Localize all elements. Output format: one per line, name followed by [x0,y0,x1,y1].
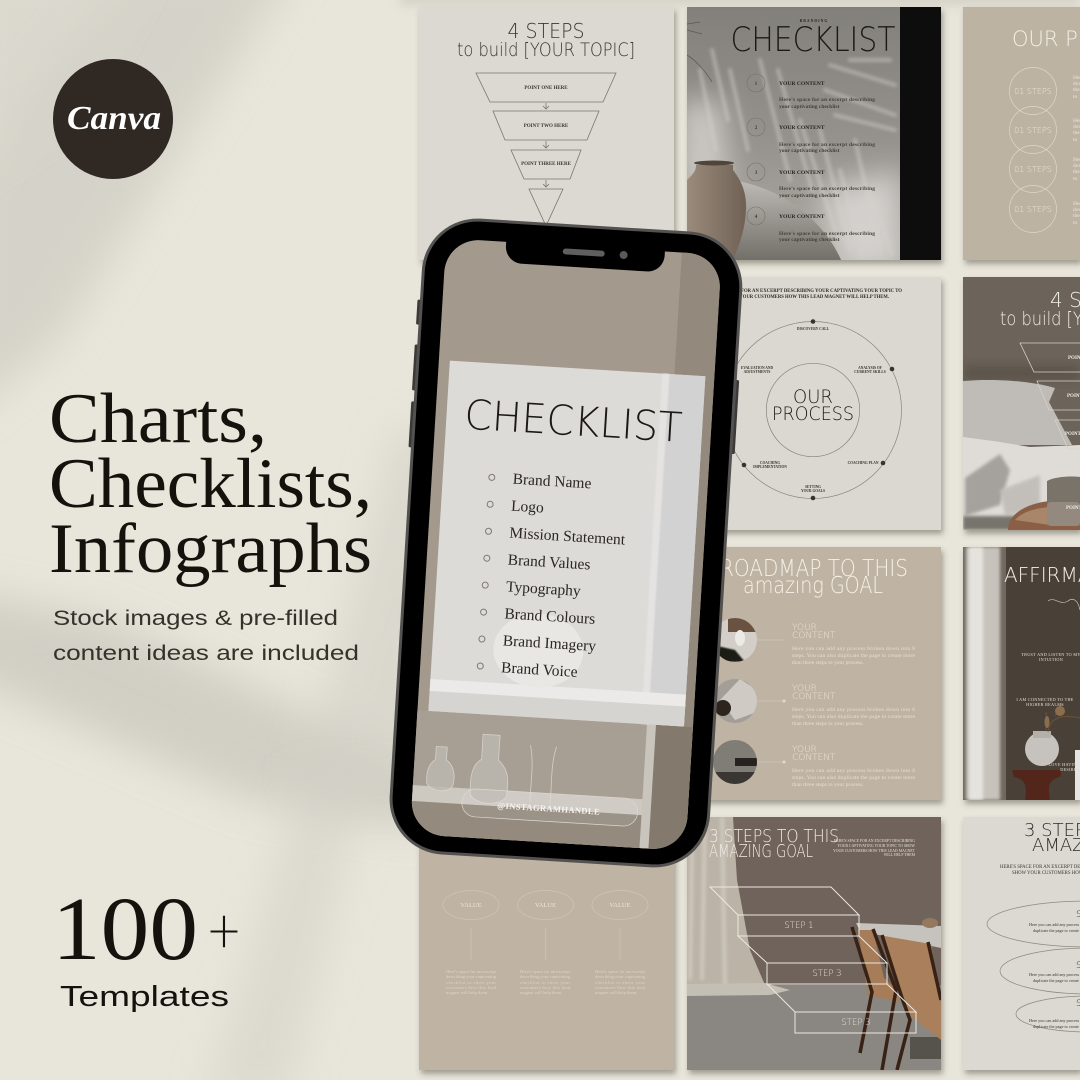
instagram handle pill: @INSTAGRAMHANDLE [497,800,600,817]
process title: PROCESS [772,403,854,425]
process labels: DISCOVERY CALL [797,327,830,331]
table [856,923,941,948]
roadmap steps text [792,623,836,763]
process labels: ANALYSIS OF [858,366,883,370]
funnel title: 4 STEPS [508,19,584,43]
process labels: CURRENT SKILLS [854,370,886,374]
panel: 4 steps funnel [419,7,674,260]
panel: our process steps: the [1073,87,1080,93]
panel: our process circle diagram [687,277,941,530]
panel: our process steps: to [1073,94,1078,100]
affirmations text: I AM CONNECTED TO THE [1016,697,1074,702]
funnel title: to build [YOUR TOPIC] [457,39,635,61]
checklist panel text: BRANDING [800,19,828,23]
heading: Charts, Checklists, Infographs: Charts, [49,380,267,458]
panel: our process steps: 01 STEPS [1014,205,1052,214]
checklist panel text: 4 [755,215,758,220]
checklist panel text: your captivating checklist [779,148,840,154]
checklist items: Typography [506,578,581,600]
panel: our process steps: the [1073,169,1080,175]
panel: roadmap: than three steps to your process. [792,782,864,788]
rug [687,983,790,996]
value descriptions: checklist to show your [446,980,496,985]
checklist panel text: Here's space for an excerpt describing [779,97,875,103]
process labels [741,327,886,493]
checklist panel text: YOUR CONTENT [779,125,825,131]
white checklist card [428,361,705,727]
chair one [858,930,900,1002]
phone speaker [563,248,605,257]
panel: our process steps: 01 STEPS [1014,126,1052,135]
checklist items: Brand Values [507,551,591,574]
white round vase [494,614,583,686]
3 steps text and stairs: YOUR CAPTIVATING YOUR TOPIC TO SHOW [837,844,915,848]
value descriptions: customers how this lead [595,985,646,990]
value descriptions: Here's space for an excerpt [446,969,497,974]
pillow [963,380,1072,445]
panel: our process circle diagram: HERE'S SPACE FOR AN EXCERPT DESCRIBING YOUR CAPTIVATING YOUR TOPIC TO [706,289,902,294]
value descriptions: Here's space for an excerpt [520,969,571,974]
affirmations text: INTUITION [1039,657,1063,662]
step circles [1010,68,1056,232]
vase [687,165,746,262]
phone notch [505,238,665,272]
affirmations text [1004,563,1080,772]
process labels: SETTING [805,485,821,489]
tray [1008,501,1080,530]
subheading text: Stock images & pre-filled [53,607,338,630]
panel: our process circle diagram: SHOW YOUR CUSTOMERS HOW THIS LEAD MAGNET WILL HELP THEM. [724,295,890,300]
checklist items: Mission Statement [509,525,626,549]
panel: our process steps: 01 STEPS [1014,87,1052,96]
value descriptions: describing your captivating [520,974,571,979]
checklist panel text: 1 [755,82,758,87]
panel: 3 steps photo [687,817,941,1070]
heading: Charts, Checklists, Infographs [49,380,372,588]
panel: roadmap: than three steps to your process. [792,721,864,727]
phone side buttons [408,299,743,467]
logo: Canva badge: Canva [67,100,161,137]
panel: roadmap: Here you can add any process broken down into 6 [792,646,915,652]
roadmap photos [713,618,757,784]
stool [1012,770,1062,800]
process labels: COACHING PLAN [848,461,879,465]
bedroom panel text [1000,288,1080,511]
stat: 100+ templates [52,880,242,1013]
3 steps text and stairs: YOUR CUSTOMERS HOW THIS LEAD MAGNET [833,849,916,853]
roadmap title [720,556,908,599]
checklist items [501,471,630,683]
panel: affirmations photo [963,547,1080,800]
checklist panel text: Here's space for an excerpt describing [779,231,875,237]
process title: OUR [793,386,833,408]
panel: our process steps: 01 STEPS [1014,165,1052,174]
checklist panel text: YOUR CONTENT [779,81,825,87]
panel: our process steps: the [1073,213,1080,219]
stat: 100+ templates: + [206,901,242,959]
phone mockup [384,217,748,869]
3 steps text and stairs: STEP 1 [784,921,814,931]
3 steps text and stairs: 3 STEPS TO THIS [709,826,839,847]
checklist panel text: your captivating checklist [779,104,840,110]
roadmap steps text: YOUR [792,623,817,633]
checklist panel text: your captivating checklist [779,193,840,199]
checklist items: Brand Voice [501,659,578,681]
roadmap steps text: YOUR [792,684,817,694]
curtain [963,547,1006,800]
funnel labels: POINT ONE HERE [524,86,568,91]
right door frame [647,725,695,852]
bright wall patches [680,100,730,190]
panel: our process steps: to [1073,220,1078,226]
ovals [987,901,1080,1032]
process labels: IMPLEMENTATION [753,465,787,469]
panel: our process steps [963,7,1080,260]
checklist panel text: YOUR CONTENT [779,214,825,220]
3 steps text and stairs [709,826,916,1033]
panel: 3 steps ovals [963,817,1080,1070]
checklist items: Brand Imagery [502,632,597,655]
3 steps text and stairs: WILL HELP THEM [884,853,916,857]
value descriptions: magnet will help them. [520,990,562,995]
subheading text: content ideas are included [53,642,359,665]
roadmap steps text: CONTENT [792,753,836,763]
stat: 100+ templates: Templates [60,981,229,1013]
roadmap steps text: CONTENT [792,692,836,702]
process labels: ADJUSTMENTS [744,370,770,374]
panel: value columns: VALUE [460,902,482,909]
heading: Charts, Checklists, Infographs: Checklists, [49,445,372,523]
stat: 100+ templates: 100 [52,880,198,979]
checklist panel text: Here's space for an excerpt describing [779,186,875,192]
process title [772,386,854,425]
value ovals [443,890,648,960]
checklist items: Logo [511,498,545,517]
panel: roadmap: Here you can add any process broken down into 6 [792,707,915,713]
dark window strip [900,7,941,260]
value descriptions: customers how this lead [446,985,497,990]
checklist panel text: YOUR CONTENT [779,170,825,176]
roadmap steps text: CONTENT [792,631,836,641]
funnel labels: POINT TWO HERE [524,124,569,129]
value descriptions: describing your captivating [446,974,497,979]
panel: roadmap: steps. You can also duplicate the page to create more [792,653,916,659]
value descriptions: describing your captivating [595,974,646,979]
panel: our process steps: the [1073,130,1080,136]
subheading text [53,607,359,665]
panel: branding checklist photo [680,7,941,270]
3 steps text and stairs: STEP 3 [841,1018,871,1028]
value descriptions: checklist to show your [520,980,570,985]
panel: roadmap: steps. You can also duplicate the page to create more [792,775,916,781]
funnel title [457,19,635,61]
phone camera [619,251,628,259]
3 steps text and stairs: AMAZING GOAL [709,841,813,862]
curtain [687,817,765,990]
shelf [410,785,650,816]
panel: our process steps: to [1073,137,1078,143]
checklist panel text: your captivating checklist [779,237,840,243]
checklist panel text: Here's space for an excerpt describing [779,142,875,148]
value descriptions: customers how this lead [520,985,571,990]
roadmap title: ROADMAP TO THIS [720,556,908,582]
panel: 4 steps bedroom photo [963,277,1080,530]
phone screen [408,236,724,852]
roadmap title: amazing GOAL [743,573,883,599]
funnel chart [476,73,616,226]
affirmations text: HIGHER REALMS [1026,702,1064,707]
roadmap connectors [757,640,785,763]
panel: roadmap: than three steps to your process. [792,660,864,666]
vase [1025,732,1059,766]
palm shadows [697,48,898,210]
value descriptions [446,969,646,995]
instagram handle pill [461,788,638,827]
panel: roadmap: steps. You can also duplicate the page to create more [792,714,916,720]
sheets [963,437,1080,530]
checklist title: CHECKLIST [463,391,684,452]
checklist panel text: 3 [755,171,758,176]
stairs diagram [710,887,916,1033]
panel: value columns [419,830,674,1070]
checklist panel text [730,19,896,243]
cup [1047,476,1080,526]
funnel labels: POINT THREE HERE [521,162,572,167]
panel: roadmap: Here you can add any process broken down into 6 [792,768,915,774]
process labels: EVALUATION AND [741,366,773,370]
phone body [388,217,744,869]
heading: Charts, Checklists, Infographs: Infographs [49,510,372,588]
value descriptions: checklist to show your [595,980,645,985]
panel: value columns: VALUE [609,902,631,909]
3 steps text and stairs: STEP 3 [812,969,842,979]
value descriptions: Here's space for an excerpt [595,969,646,974]
checklist bullets [477,474,495,669]
panel: roadmap [687,547,941,800]
glass vases [425,731,557,807]
funnel labels [521,86,572,167]
checklist items: Brand Colours [504,605,596,628]
roadmap steps text: YOUR [792,745,817,755]
checklist panel text: 2 [755,126,758,131]
process labels: YOUR GOALS [801,489,825,493]
panel: our process steps: to [1073,176,1078,182]
table curve [734,182,841,260]
3 steps text and stairs: HERE'S SPACE FOR AN EXCERPT DESCRIBING [834,839,915,843]
checklist items: Brand Name [512,471,592,492]
value descriptions: magnet will help them. [595,990,637,995]
process labels: COACHING [760,461,780,465]
process rings [724,322,902,498]
affirmations text: TRUST AND LISTEN TO MY [1021,652,1080,657]
dried stems [1046,704,1080,732]
logo: Canva badge [53,59,173,179]
value descriptions: magnet will help them. [446,990,488,995]
process nodes [732,319,894,500]
checklist panel text: CHECKLIST [730,20,896,60]
chair two [884,936,941,1040]
panel: value columns: VALUE [535,902,556,909]
